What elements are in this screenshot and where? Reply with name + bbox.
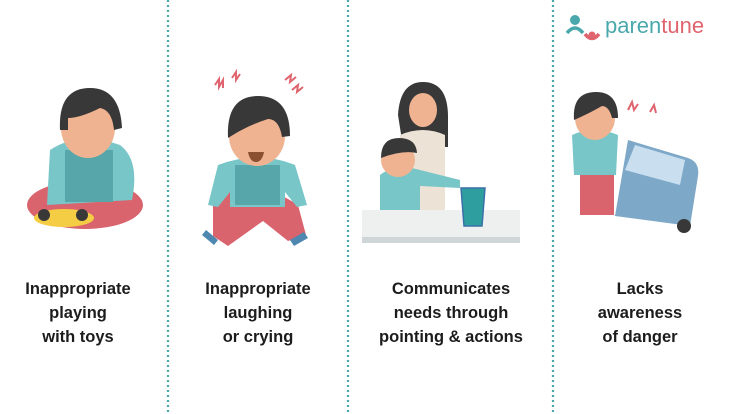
- labels: laughing: [224, 304, 292, 322]
- labels: Inappropriate: [205, 280, 311, 298]
- labels: awareness: [598, 304, 682, 322]
- labels: of danger: [602, 328, 678, 346]
- labels: Communicates: [392, 280, 510, 298]
- illustration: mother and child pointing at glass: [362, 82, 520, 243]
- illustration: child near car: [572, 92, 698, 233]
- logo: parentune: parentune: [605, 13, 704, 38]
- labels: needs through: [394, 304, 508, 322]
- labels: [25, 280, 682, 346]
- labels: or crying: [223, 328, 293, 346]
- illustration: child playing with toy: [27, 88, 143, 229]
- labels: with toys: [41, 328, 114, 346]
- labels: playing: [49, 304, 107, 322]
- labels: Lacks: [617, 280, 663, 298]
- labels: Inappropriate: [25, 280, 131, 298]
- labels: pointing & actions: [379, 328, 523, 346]
- illustration: child laughing: [202, 72, 308, 246]
